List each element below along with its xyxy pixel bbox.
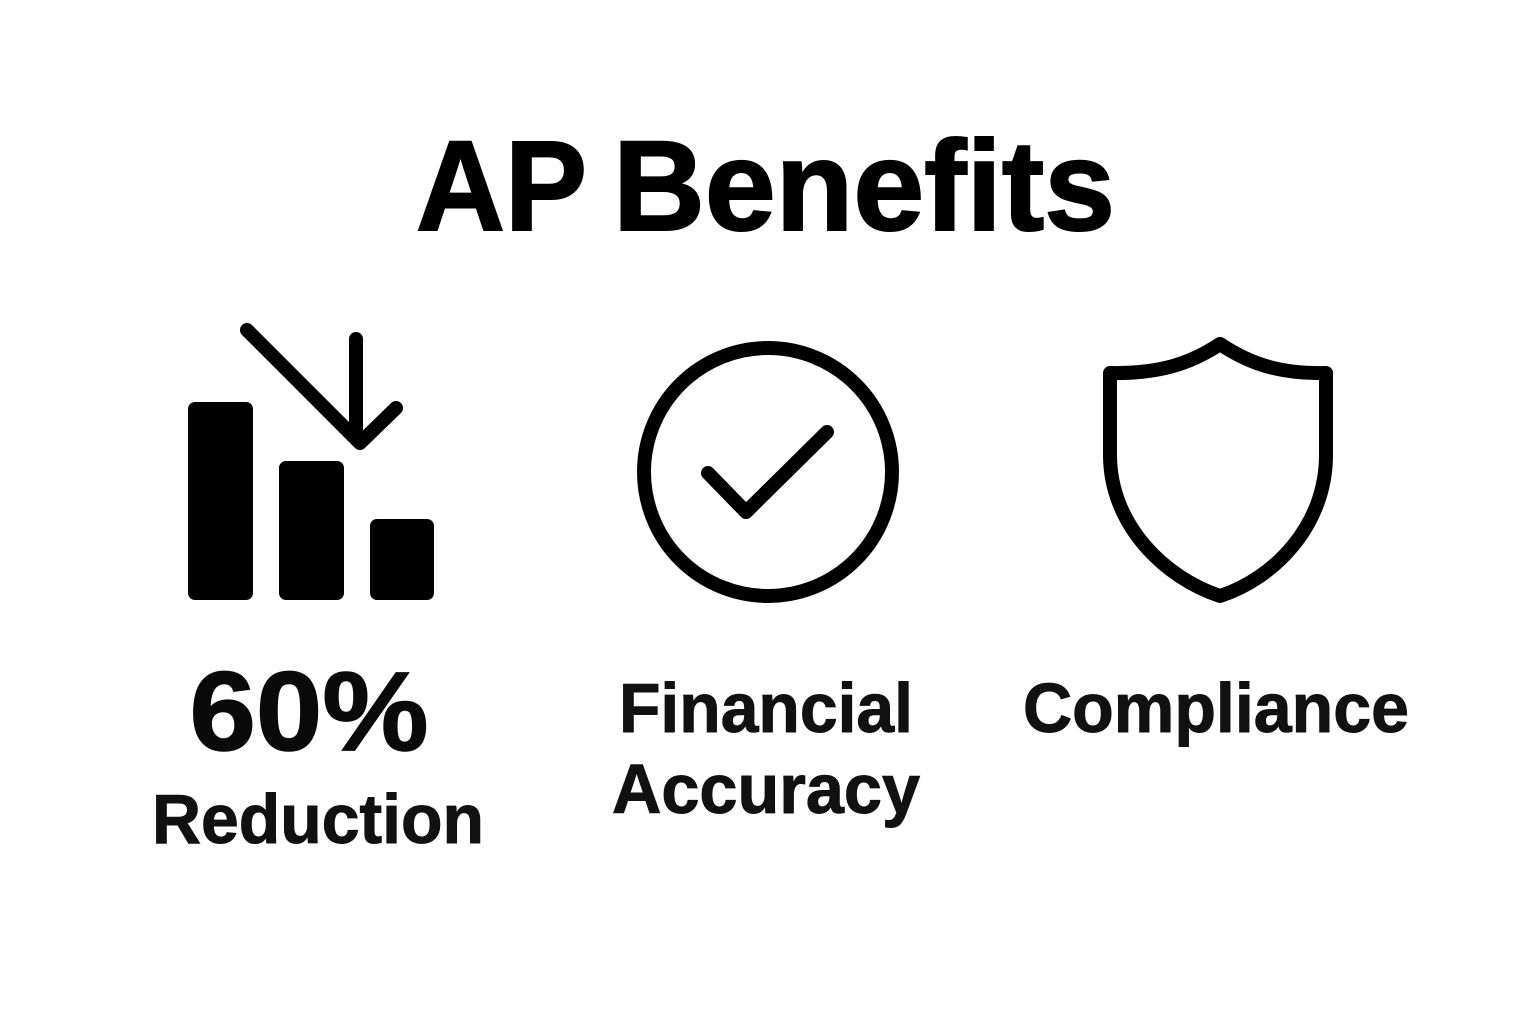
stat: 60%: 60% <box>190 649 428 774</box>
icon: shield <box>1110 344 1326 596</box>
label: Financial Accuracy: Financial <box>619 669 913 747</box>
label: Financial Accuracy <box>612 669 920 828</box>
icon: bar chart with down arrow <box>188 330 434 600</box>
label: Financial Accuracy: Accuracy <box>612 750 920 828</box>
icon: circle check <box>644 348 892 596</box>
title: Benefits <box>613 115 1115 258</box>
title: AP <box>416 115 587 258</box>
label: Compliance: Compliance <box>1023 669 1409 747</box>
label: Reduction: Reduction <box>152 780 484 858</box>
